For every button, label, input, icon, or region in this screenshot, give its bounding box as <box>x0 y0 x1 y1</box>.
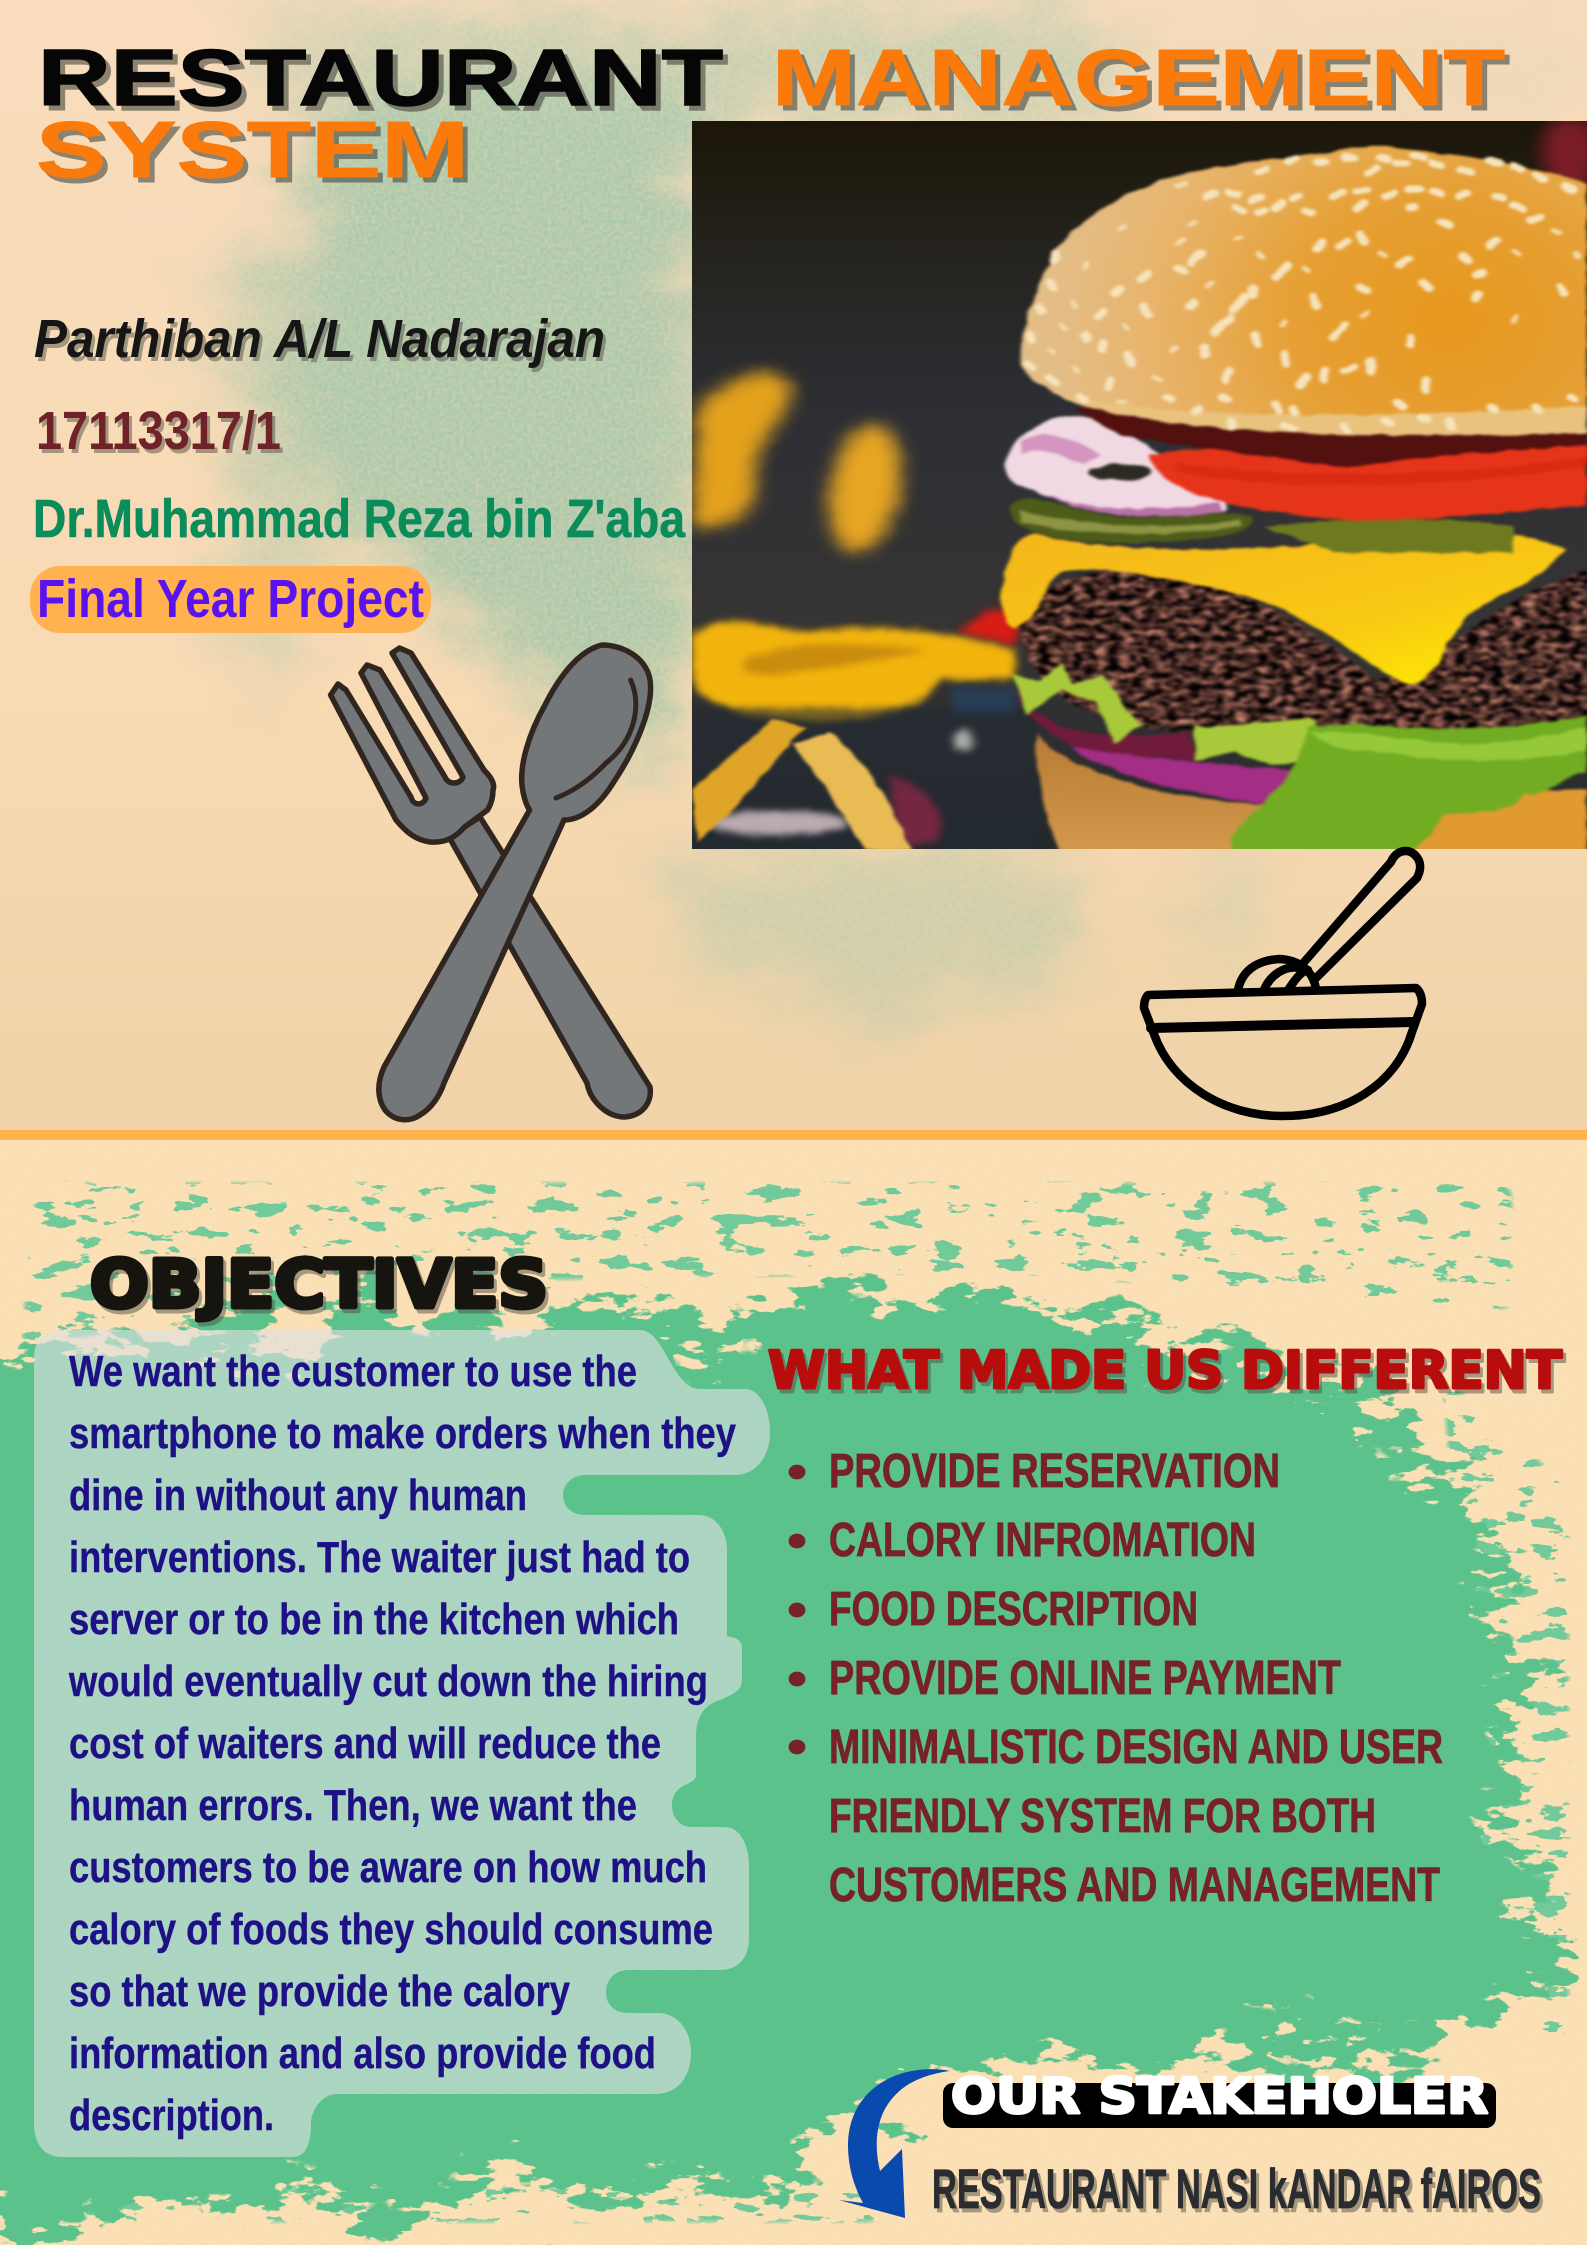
objectives paragraph: server or to be in the kitchen which <box>69 1595 679 1644</box>
objectives paragraph: calory of foods they should consume <box>69 1905 713 1954</box>
panel: bottom section green paint splash <box>0 1140 1587 2245</box>
objectives paragraph: dine in without any human <box>69 1471 527 1520</box>
objectives paragraph: interventions. The waiter just had to <box>69 1533 690 1582</box>
heading: what made us different: WHAT MADE US DIFFERENT <box>768 1341 1563 1401</box>
objectives paragraph: description. <box>69 2091 274 2140</box>
icon: crossed fork and spoon <box>331 645 651 1120</box>
bullet list: differences: FRIENDLY SYSTEM FOR BOTH <box>829 1790 1376 1843</box>
objectives paragraph: information and also provide food <box>69 2029 656 2078</box>
arrow: curved blue arrow <box>839 2069 950 2218</box>
fork <box>331 648 650 1117</box>
bullet list: differences: PROVIDE ONLINE PAYMENT <box>829 1652 1341 1705</box>
objectives paragraph: would eventually cut down the hiring <box>68 1657 708 1706</box>
bowl <box>1144 988 1422 1116</box>
title: MANAGEMENT <box>772 33 1505 122</box>
title: RESTAURANT <box>38 33 723 122</box>
final year project badge: Final Year Project <box>37 569 424 629</box>
objectives paragraph: smartphone to make orders when they <box>69 1409 736 1458</box>
objectives paragraph: so that we provide the calory <box>69 1967 570 2016</box>
objectives paragraph: We want the customer to use the <box>69 1347 637 1396</box>
bullet list: differences <box>789 1445 1443 1912</box>
title <box>36 33 1505 194</box>
objectives paragraph: cost of waiters and will reduce the <box>69 1719 661 1768</box>
objectives paragraph: human errors. Then, we want the <box>69 1781 637 1830</box>
photo: cheeseburger and fries <box>692 115 1587 856</box>
student name: Parthiban A/L Nadarajan <box>34 309 605 369</box>
whisk loops <box>1238 959 1316 990</box>
bullet list: differences: FOOD DESCRIPTION <box>829 1583 1198 1636</box>
icon: bowl and whisk <box>1144 851 1422 1116</box>
bullet list: differences: PROVIDE RESERVATION <box>829 1445 1280 1498</box>
panel: top header background with green watercolour <box>0 0 1587 1130</box>
divider bar <box>0 1130 1587 1140</box>
stakeholder heading: OUR STAKEHOLER <box>951 2068 1488 2125</box>
title: SYSTEM <box>36 105 469 194</box>
whisk handle <box>1299 851 1420 980</box>
bullet list: differences: CALORY INFROMATION <box>829 1514 1256 1567</box>
panel: objectives text bubble <box>34 1330 770 2157</box>
student id: 17113317/1 <box>36 401 281 461</box>
supervisor name: Dr.Muhammad Reza bin Z'aba <box>33 489 686 549</box>
objectives paragraph: customers to be aware on how much <box>69 1843 707 1892</box>
objectives paragraph <box>68 1347 736 2140</box>
objectives heading: OBJECTIVES <box>90 1246 548 1323</box>
spoon <box>379 645 651 1120</box>
